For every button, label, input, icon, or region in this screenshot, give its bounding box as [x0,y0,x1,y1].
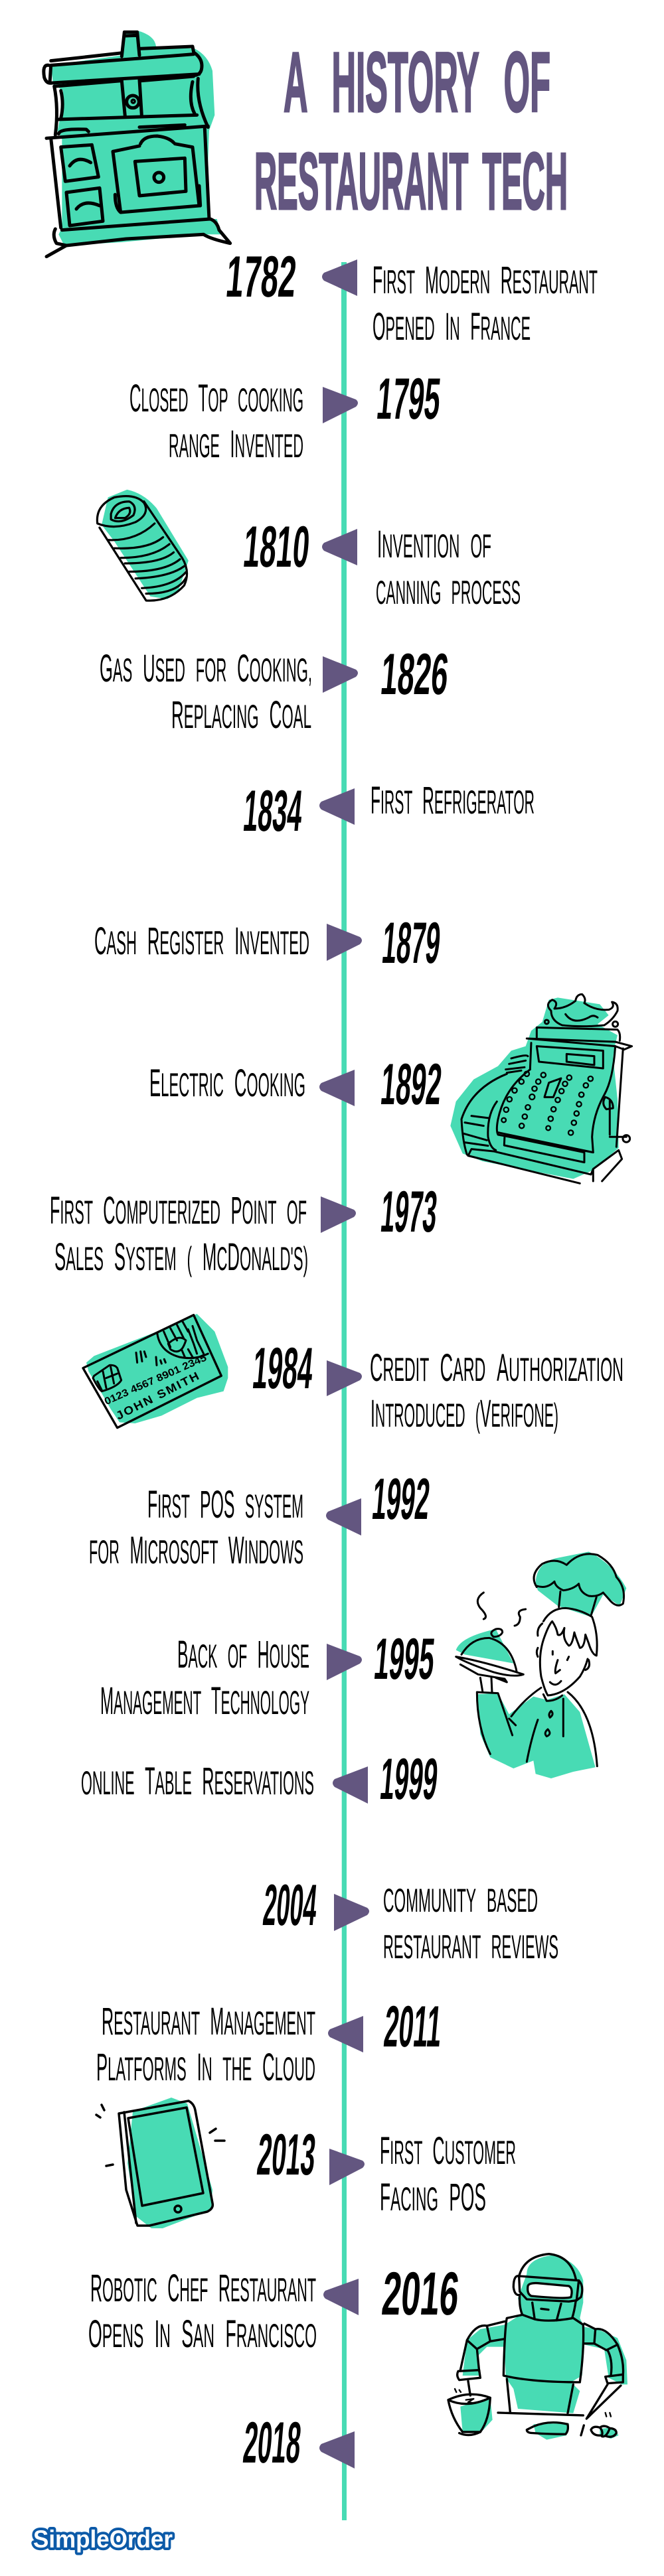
arrow [319,788,355,825]
arrow [319,1070,355,1106]
event text: CASH REGISTER INVENTED [94,920,309,963]
arrow [326,1498,361,1536]
title [254,35,568,226]
year 1826: 1826 [378,641,451,707]
arrow [333,1766,368,1804]
event text: GAS USED FOR COOKING, [100,647,312,690]
event text [129,377,303,466]
arrow [329,2149,365,2185]
arrow [323,656,358,693]
event text: OPENED IN FRANCE [373,305,531,348]
year 1810: 1810 [241,514,312,579]
event: 1892 [149,1051,444,1117]
event: 2016 [88,2259,461,2356]
event: 1834 [241,778,535,843]
text: 1995 [372,1626,437,1691]
event text: FIRST REFRIGERATOR [371,779,535,822]
event text: RANGE INVENTED [169,423,303,466]
text: 2011 [382,1993,444,2059]
arrow [321,1196,356,1233]
event: 1782 [224,244,598,348]
event text [373,259,598,348]
icon: tablet [96,2098,224,2228]
text: 1973 [378,1179,440,1244]
event: 2018: 2018 [241,2409,303,2475]
event text: FIRST POS SYSTEM [147,1483,303,1526]
event: 1834: 1834 [241,778,305,843]
arrow [323,2279,359,2315]
event text: ONLINE TABLE RESERVATIONS [81,1760,314,1803]
icon: robot chef [448,2254,627,2440]
event: 2013 [255,2121,516,2219]
event text [370,1346,623,1435]
icon: stove [44,31,230,257]
event text [383,1882,558,1966]
event text: PLATFORMS IN THE CLOUD [96,2046,315,2089]
event text: FIRST COMPUTERIZED POINT OF [50,1189,307,1232]
icon: cash register [450,994,632,1183]
card number: 0123 4567 8901 2345 [103,1352,208,1407]
event: 2004 [261,1872,558,1966]
event text [89,1483,303,1572]
arrow [327,1360,362,1396]
event: 2011 [96,1993,444,2089]
arrow [327,924,362,961]
year 1782: 1782 [224,244,299,309]
event text [100,647,312,737]
event: 1999 [81,1746,440,1812]
event text: REPLACING COAL [171,693,311,737]
text: 1892 [378,1051,444,1117]
timeline line [341,262,347,2520]
event text: FIRST CUSTOMER [380,2129,516,2173]
event text: FACING POS [380,2176,486,2219]
arrow [334,1894,369,1931]
year 1795: 1795 [374,366,443,431]
event: 2004: 2004 [261,1872,319,1938]
event: 1995 [100,1626,437,1723]
event text: ELECTRIC COOKING [149,1062,305,1105]
event: 1795 [129,366,443,466]
text: 1879 [380,910,443,975]
event text [96,2000,315,2089]
event text: ROBOTIC CHEF RESTAURANT [90,2267,316,2310]
event text: CLOSED TOP COOKING [129,377,303,420]
event: 1973 [50,1179,440,1279]
event: 1810 [241,514,521,611]
event text [380,2129,516,2219]
logo: SimpleOrder: SimpleOrder [33,2526,173,2553]
event text [88,2267,317,2356]
event text: BACK OF HOUSE [177,1633,309,1676]
text: 1992 [370,1466,432,1532]
arrow [328,2016,363,2052]
icon: chef with cloche [456,1551,626,1778]
event: 1826 [100,641,451,737]
event text: INTRODUCED (VERIFONE) [371,1392,558,1435]
event text [50,1189,308,1279]
event text: SALES SYSTEM ( MCDONALD'S) [54,1236,308,1279]
event text [100,1633,309,1723]
card holder name: JOHN SMITH [114,1368,203,1423]
event: 1879 [94,910,443,975]
event text: INVENTION OF [377,523,491,566]
event text: RESTAURANT MANAGEMENT [102,2000,315,2043]
arrow [323,387,358,423]
event: 1992 [89,1466,432,1572]
event: 1984 [250,1335,623,1435]
year 2016: 2016 [380,2259,461,2328]
arrow [319,2431,355,2469]
text: 1999 [378,1746,440,1812]
event text: OPENS IN SAN FRANCISCO [88,2313,317,2356]
event text: FOR MICROSOFT WINDOWS [89,1529,303,1572]
event: 2013: 2013 [255,2121,318,2187]
arrow [322,259,357,296]
event text: MANAGEMENT TECHNOLOGY [100,1680,309,1723]
event: 1984: 1984 [250,1335,315,1401]
arrow [322,529,357,565]
icon: food can [97,490,189,601]
event text [376,523,521,611]
arrow [327,1644,362,1680]
icon: credit card [83,1314,228,1428]
